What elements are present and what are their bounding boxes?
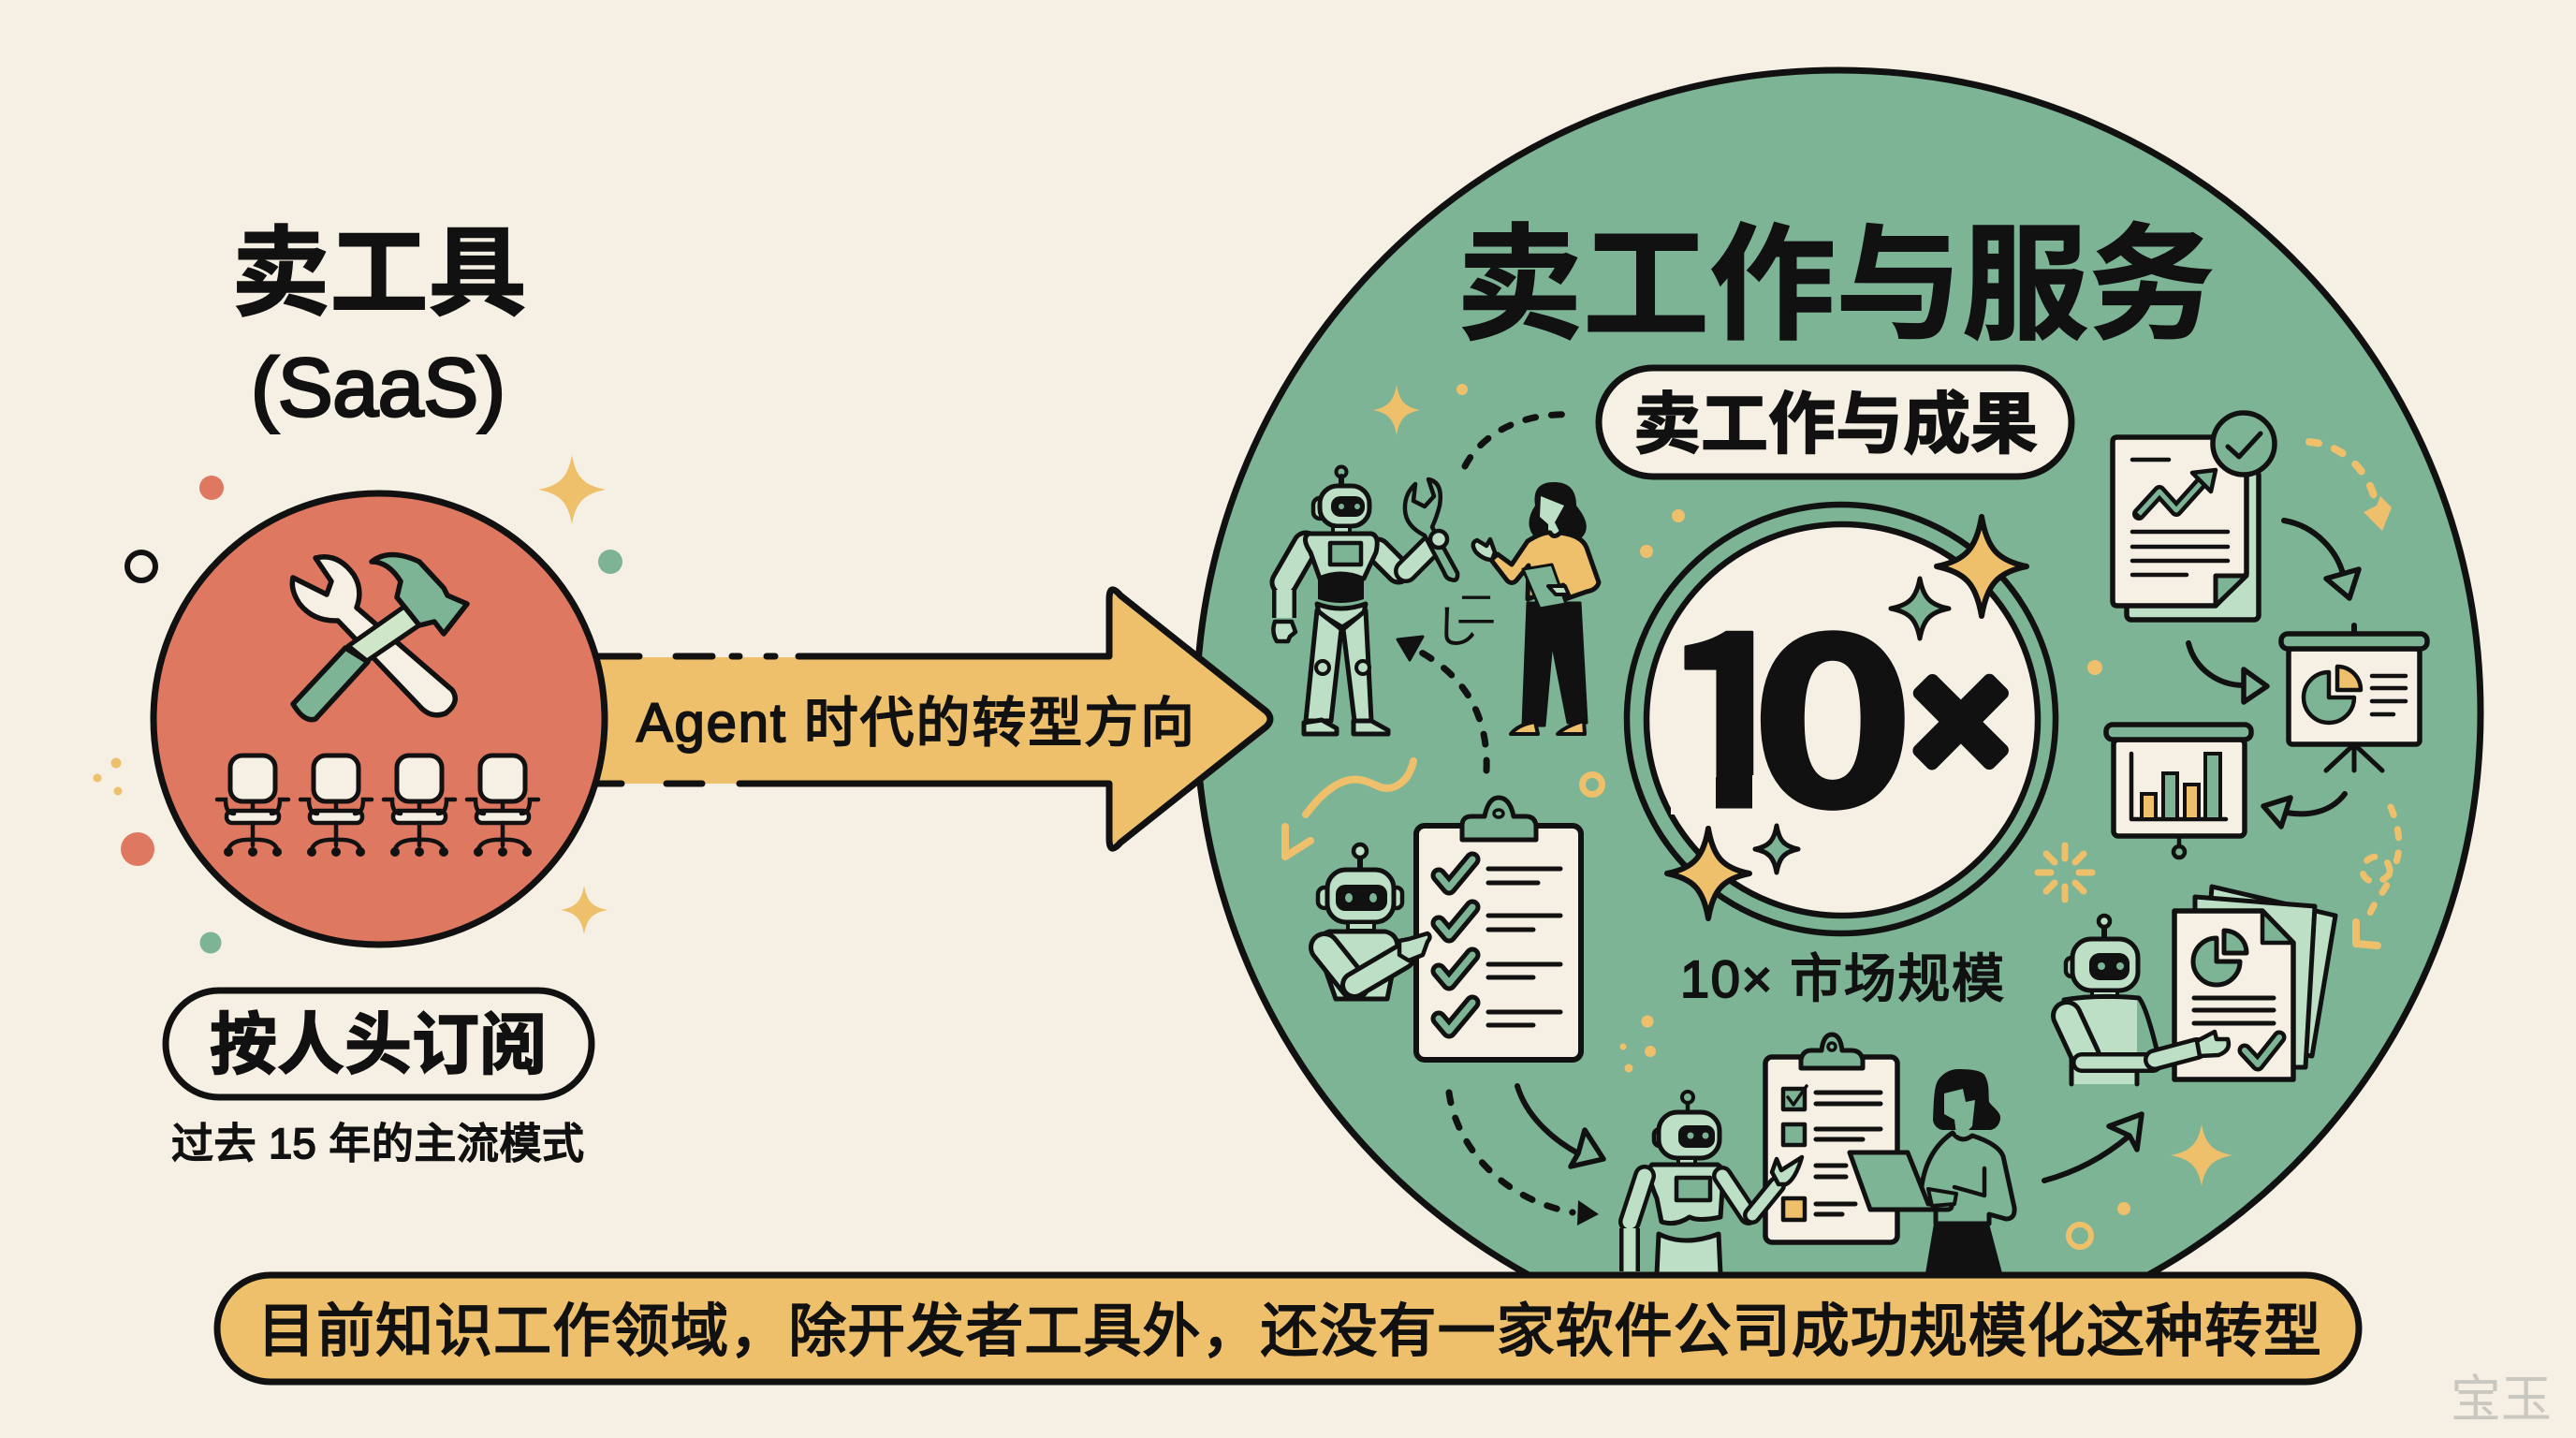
- pill: per-seat subscription: 按人头订阅: [210, 990, 547, 1088]
- red circle: tools and seats: [154, 493, 605, 945]
- arrow: transformation direction: [590, 590, 1270, 848]
- icon: report with growth chart: [2113, 413, 2275, 620]
- robot limbs: [1284, 545, 1306, 582]
- watermark: 宝玉: [2451, 1357, 2552, 1431]
- wrench in robot hand: [1405, 479, 1457, 580]
- arrow: curve upward: [2044, 1114, 2142, 1181]
- stray hand-drawn marks: し: [1434, 590, 1479, 655]
- big green circle: sell work and services: [1196, 70, 2481, 1355]
- heading: sell work and services: 卖工作与服务: [1456, 182, 2215, 365]
- icon: robot holding wrench: [1273, 466, 1457, 734]
- arrow: pie board to bar board: [2263, 794, 2345, 827]
- heading: sell tools: 卖工具: [231, 194, 527, 336]
- icon: clipboard with checklist and robot: [1318, 798, 1581, 1060]
- robot presenting: [2064, 916, 2229, 1084]
- icon: woman with clipboard: [1473, 482, 1599, 734]
- task rows: [1783, 1086, 1881, 1220]
- sparkles: [1667, 517, 2027, 918]
- arrow: report to pie board: [2188, 643, 2267, 702]
- decoration: yellow marks in green circle: [1373, 384, 2232, 1247]
- big number 10x: 0: [1751, 540, 1914, 871]
- stray hand-drawn marks: [1434, 579, 1496, 655]
- arrow label: Agent 时代的转型方向: [637, 693, 1194, 754]
- icon: four office chairs: [217, 756, 538, 857]
- icon: presentation board with pie chart: [2281, 625, 2427, 770]
- arrow: report to presentation: [2284, 521, 2359, 598]
- label: 10x market size: 10× 市场规模: [1680, 949, 2004, 1008]
- robot with raised hand: [1630, 1092, 1802, 1274]
- icon: wrench: [292, 557, 455, 715]
- arrow: yellow dashed swirl: [2356, 807, 2399, 946]
- icon: robot with report pages: [2064, 887, 2335, 1084]
- caption: mainstream model: 过去 15 年的主流模式: [171, 1120, 584, 1167]
- arrow: curve to robot: [1517, 1086, 1603, 1167]
- woman with laptop: [1850, 1069, 2014, 1273]
- left decorations: [94, 455, 622, 953]
- icon: presentation board with bar chart: [2106, 725, 2251, 858]
- icon: hammer: [293, 554, 467, 720]
- bottom banner: 目前知识工作领域，除开发者工具外，还没有一家软件公司成功规模化这种转型: [257, 1299, 2321, 1364]
- big number 10x: 1: [1661, 534, 1800, 875]
- dashed arrow: towards robot: [1398, 637, 1486, 770]
- yellow squiggle arrow: [1285, 761, 1413, 857]
- checklist ticks: [1439, 859, 1472, 1031]
- arrow: dashed curve to robot: [1449, 1093, 1599, 1225]
- 10x badge: [1627, 505, 2056, 933]
- stray hand-drawn marks: 二: [1456, 579, 1496, 636]
- arrow: yellow dashed: [2309, 442, 2392, 531]
- bottom banner: [217, 1275, 2359, 1382]
- heading: SaaS: (SaaS): [251, 341, 505, 433]
- dashed arrow: top arc: [1465, 415, 1574, 466]
- pill: sell work and outcomes: 卖工作与成果: [1633, 369, 2038, 467]
- robot pointing at checklist: [1318, 844, 1430, 999]
- big number 10x: ×: [1912, 627, 2009, 813]
- big number 10x: [1661, 534, 2009, 875]
- icon: clipboard with tasks, robot and woman: [1630, 1034, 2014, 1274]
